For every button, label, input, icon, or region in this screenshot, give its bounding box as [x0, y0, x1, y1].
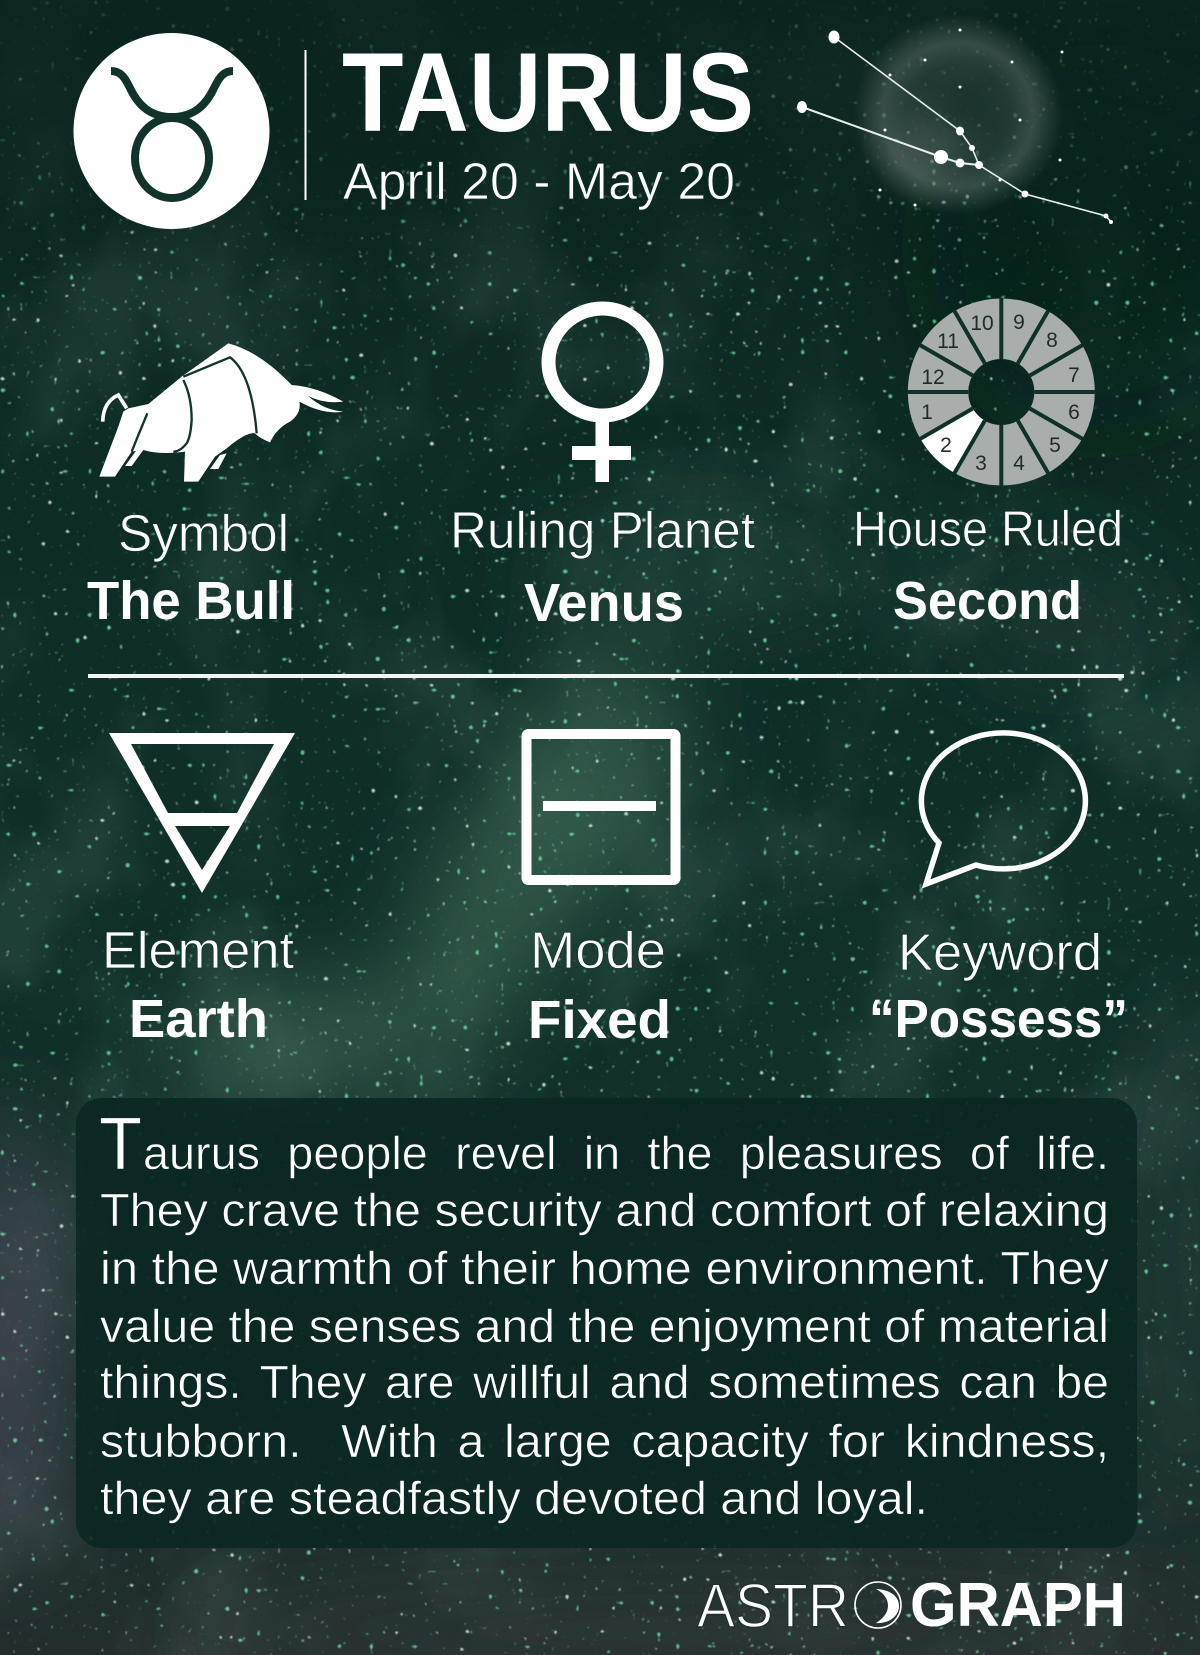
description text: aurus people revel in the pleasures of life. [143, 1127, 1109, 1179]
icon: house wheel: 5 [1049, 434, 1061, 457]
icon: house wheel: 12 [921, 366, 945, 389]
value: Earth: Earth [129, 989, 268, 1049]
panel: ruling planet [450, 308, 756, 633]
description text: They crave the security and comfort of relaxing [100, 1184, 1109, 1236]
header: sign symbol and title [74, 30, 754, 229]
description text: they are steadfastly devoted and loyal. [100, 1472, 928, 1524]
icon: Venus [548, 308, 656, 482]
panel: element [102, 733, 295, 1049]
icon: house wheel: 2 [940, 434, 952, 457]
panel: house ruled [853, 298, 1123, 631]
icon: house wheel: 8 [1046, 329, 1058, 352]
icon: house wheel: 4 [1013, 452, 1025, 475]
icon: earth triangle [109, 733, 295, 893]
description text: stubborn. With a large capacity for kindness, [100, 1415, 1109, 1467]
description text: in the warmth of their home environment. They [100, 1242, 1109, 1294]
label: House Ruled: House Ruled [853, 501, 1123, 557]
description text: T [99, 1102, 142, 1185]
title divider [304, 50, 306, 200]
label: Element: Element [102, 922, 295, 980]
icon: speech bubble [921, 733, 1085, 884]
icon: house wheel: 10 [970, 312, 994, 335]
icon: house wheel: 9 [1013, 311, 1025, 334]
logo: Astrograph [697, 1571, 1126, 1641]
title: TAURUS [342, 30, 754, 155]
value: Venus: Venus [524, 573, 684, 633]
icon: house wheel: 6 [1068, 401, 1080, 424]
icon: house wheel: 11 [937, 330, 959, 353]
icon: house wheel: 3 [975, 452, 987, 475]
logo: Astrograph: GRAPH [910, 1571, 1126, 1640]
value: Possess: “Possess” [869, 989, 1128, 1049]
icon: fixed mode square [526, 734, 676, 880]
label: Keyword: Keyword [898, 924, 1102, 982]
panel: mode [526, 734, 676, 1050]
label: Symbol: Symbol [118, 505, 289, 563]
panel: description [76, 1098, 1137, 1548]
description text: value the senses and the enjoyment of material [100, 1300, 1109, 1352]
value: The Bull: The Bull [87, 571, 295, 631]
label: Mode: Mode [530, 922, 666, 980]
label: Ruling Planet: Ruling Planet [450, 502, 756, 560]
logo: Astrograph: ASTR [697, 1572, 849, 1641]
icon: Taurus glyph in white circle [74, 33, 270, 229]
icon: house wheel: 7 [1068, 364, 1080, 387]
panel: keyword [869, 733, 1128, 1049]
icon: bull [99, 343, 343, 482]
value: Second: Second [893, 571, 1082, 631]
description text [99, 1102, 1109, 1524]
description text: things. They are willful and sometimes can be [100, 1356, 1109, 1408]
panel: symbol [87, 343, 343, 631]
icon: house wheel [907, 298, 1095, 486]
icon: house wheel: 1 [921, 401, 933, 424]
value: Fixed: Fixed [528, 990, 671, 1050]
date range: April 20 - May 20 [343, 153, 735, 211]
constellation: Taurus [797, 15, 1113, 224]
